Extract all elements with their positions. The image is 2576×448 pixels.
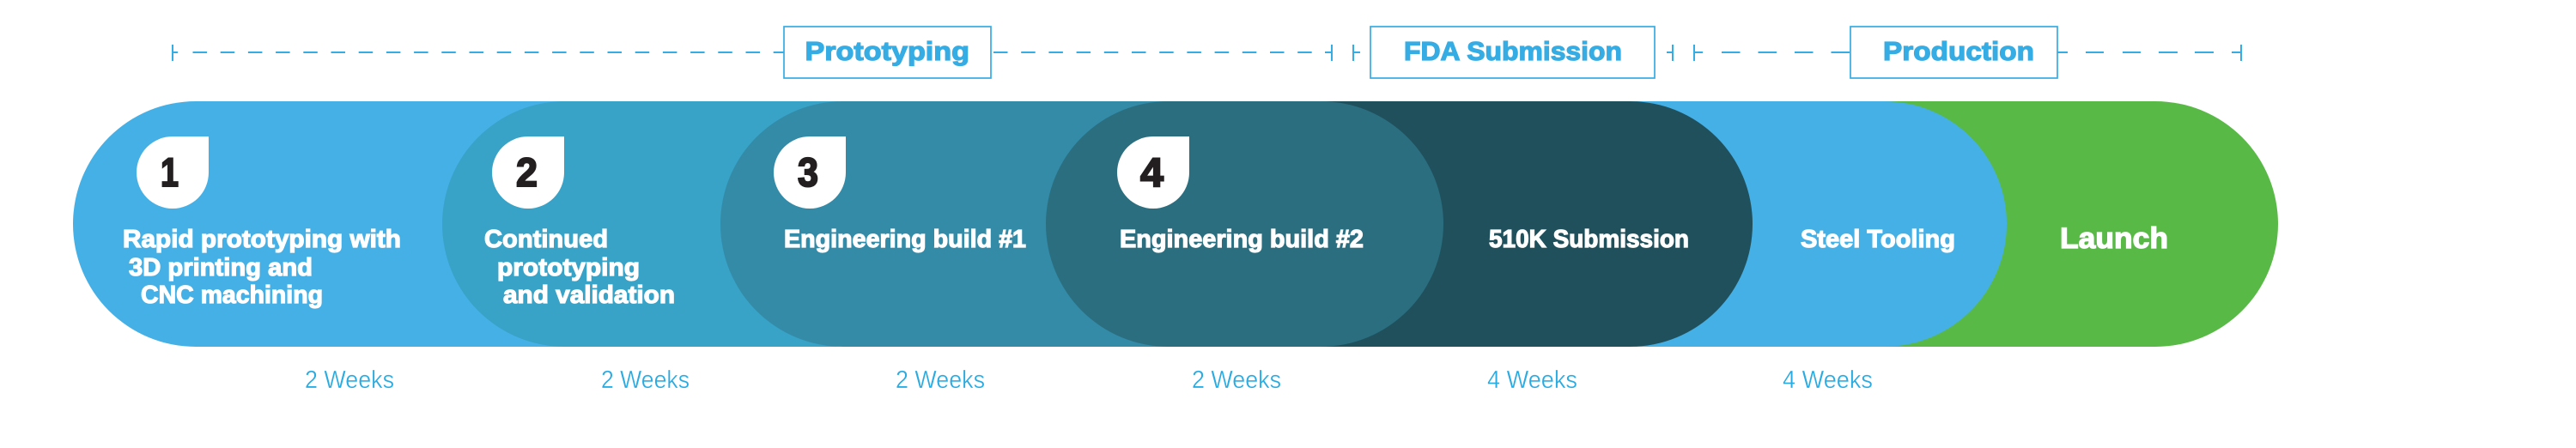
stage: 510K Submission: [1116, 101, 1753, 347]
duration labels: 2 Weeks: [896, 366, 985, 394]
phase bracket: Production: Production: [1883, 37, 2034, 66]
stage: Steel Tooling: Steel Tooling: [1801, 226, 1955, 253]
stage: Steel Tooling: [1460, 101, 2007, 347]
stage 2: Continued prototyping: [442, 101, 957, 347]
duration labels: [305, 366, 1873, 394]
text: stage 1 description: Rapid prototyping with: [123, 226, 401, 253]
icon: number badge 3: 3: [798, 149, 818, 195]
text: stage 2 description: prototyping: [497, 254, 640, 282]
icon: number badge 4: [1117, 136, 1189, 209]
stage 4: Engineering build #2: [1046, 101, 1443, 347]
stage 1: Rapid prototyping: [73, 101, 687, 347]
text: stage 1 description: CNC machining: [141, 282, 323, 309]
stage: Launch: [1717, 101, 2278, 347]
icon: number badge 2: 2: [516, 149, 538, 195]
icon: number badge 3: [774, 136, 846, 209]
duration labels: 2 Weeks: [1192, 366, 1281, 394]
phase bracket: Prototyping: Prototyping: [805, 37, 969, 66]
text: stage 2 description: Continued: [484, 226, 608, 253]
phase bracket: Prototyping: [173, 27, 1332, 78]
icon: number badge 1: [137, 136, 209, 209]
stage: 510K Submission: 510K Submission: [1489, 226, 1689, 253]
icon: number badge 1: 1: [161, 149, 179, 195]
duration labels: 4 Weeks: [1487, 366, 1577, 394]
text: stage 4 description: Engineering build #2: [1120, 226, 1364, 253]
text: stage 3 description: Engineering build #1: [784, 226, 1026, 253]
duration labels: 2 Weeks: [601, 366, 690, 394]
icon: number badge 4: 4: [1140, 149, 1163, 195]
phase bracket: FDA Submission: FDA Submission: [1404, 37, 1622, 66]
text: stage 1 description: 3D printing and: [129, 254, 313, 282]
duration labels: 2 Weeks: [305, 366, 394, 394]
stage: Launch: Launch: [2060, 222, 2168, 255]
phase bracket: FDA Submission: [1353, 27, 1673, 78]
text: stage 2 description: and validation: [503, 282, 675, 309]
stage 3: Engineering build #1: [720, 101, 1321, 347]
duration labels: 4 Weeks: [1783, 366, 1873, 394]
phase bracket: Production: [1694, 27, 2241, 78]
icon: number badge 2: [492, 136, 564, 209]
